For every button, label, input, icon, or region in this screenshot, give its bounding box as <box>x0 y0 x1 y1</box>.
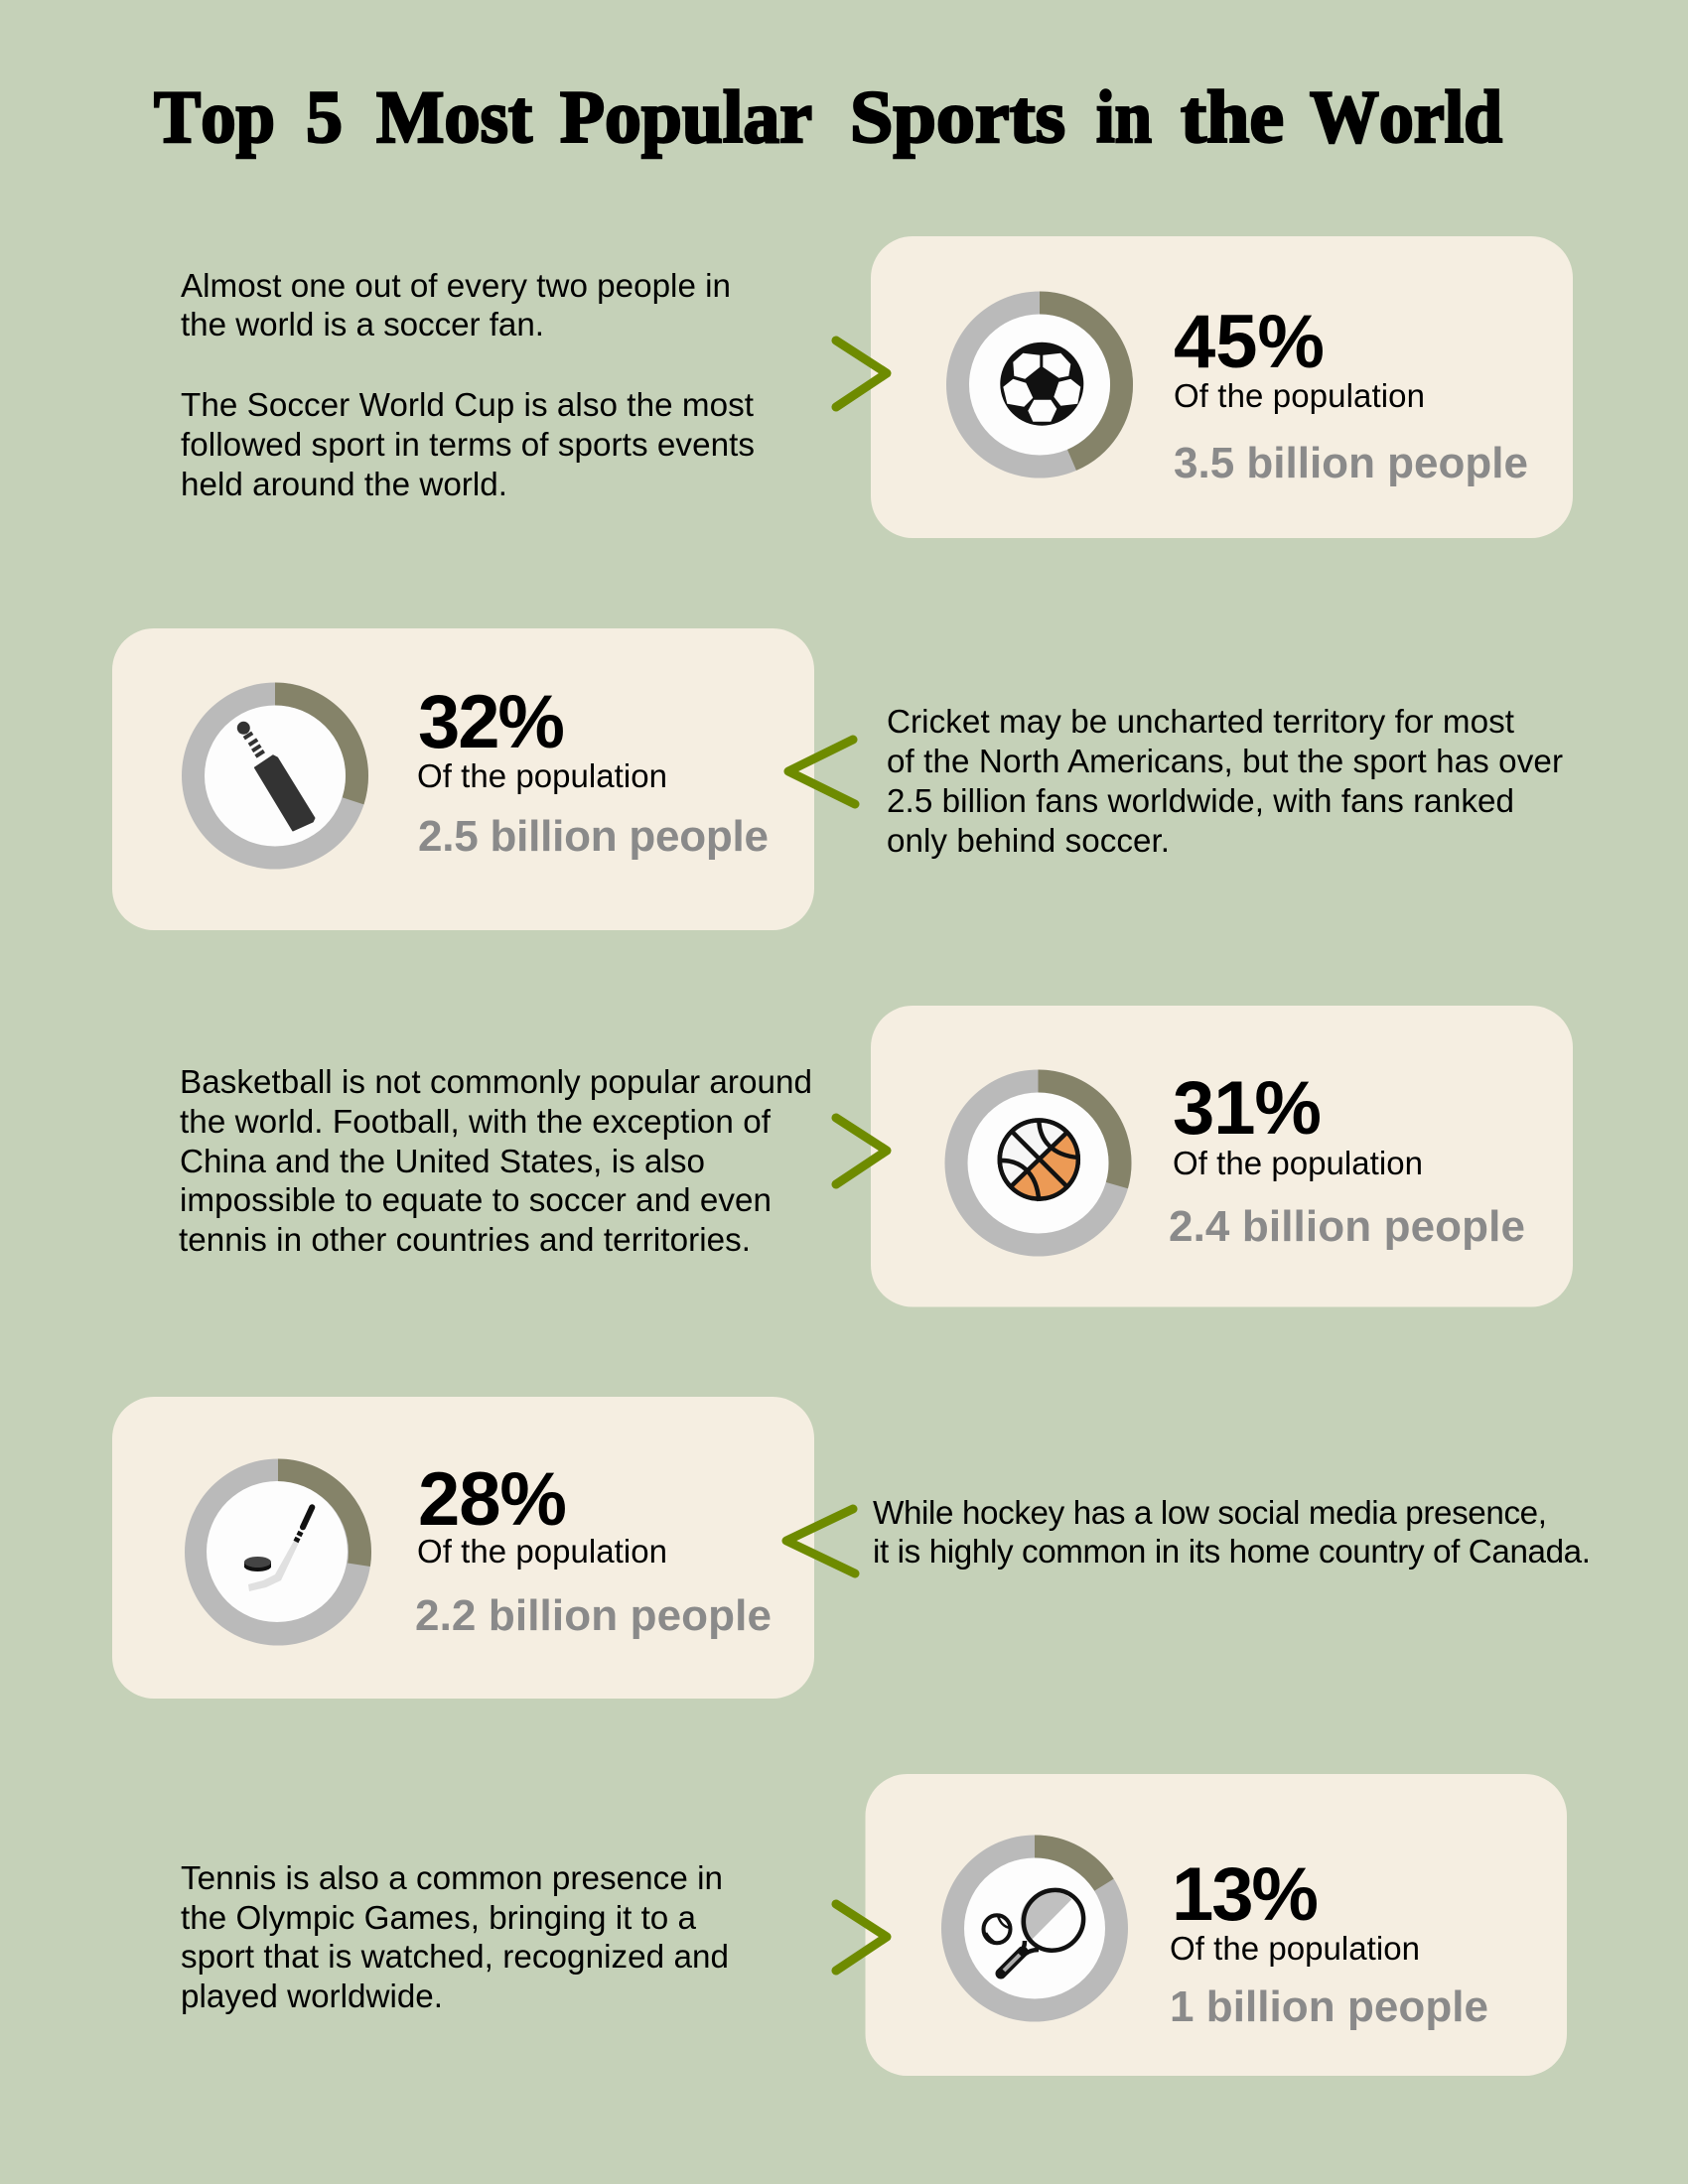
arrow: hockey <box>786 1509 855 1573</box>
title: Top <box>154 76 275 159</box>
text block: soccer: followed sport in terms of sports events <box>181 427 755 464</box>
text block: basketball: Basketball is not commonly popular around <box>180 1064 812 1101</box>
text block: cricket: only behind soccer. <box>887 823 1170 860</box>
stat: 45%: 45% <box>1174 300 1325 384</box>
title: 5 <box>306 76 343 159</box>
title: World <box>1310 76 1502 159</box>
title: Most <box>376 76 532 159</box>
stat: 13%: 13% <box>1172 1852 1319 1937</box>
stat label: Of the population <box>1170 1930 1420 1967</box>
text block: tennis: the Olympic Games, bringing it to a <box>181 1900 697 1937</box>
stat: 31%: 31% <box>1173 1066 1322 1151</box>
text block: basketball: impossible to equate to soccer and even <box>180 1182 772 1219</box>
text block: tennis: played worldwide. <box>181 1979 443 2015</box>
stat: people: 2.5 billion people <box>418 812 769 861</box>
donut chart: 32% <box>182 683 368 870</box>
arrow: tennis <box>836 1904 887 1971</box>
text block: hockey: While hockey has a low social media presence, <box>873 1495 1547 1532</box>
text block: soccer: The Soccer World Cup is also the most <box>181 387 754 424</box>
title: the <box>1181 76 1284 159</box>
stat: 32%: 32% <box>418 680 565 764</box>
text block: cricket: 2.5 billion fans worldwide, with fans ranked <box>887 783 1514 820</box>
icon: cricket bat <box>237 722 315 831</box>
panel: basketball <box>871 1006 1573 1306</box>
text block: basketball: the world. Football, with the exception of <box>180 1104 772 1141</box>
panel: soccer <box>871 236 1573 538</box>
text block: basketball: China and the United States, is also <box>180 1144 705 1180</box>
title: Sports <box>850 76 1065 159</box>
text block: cricket: of the North Americans, but the sport has over <box>887 744 1563 780</box>
stat label: Of the population <box>1173 1145 1423 1181</box>
title <box>154 76 1502 159</box>
donut chart: 13% <box>941 1835 1128 2021</box>
stat label: Of the population <box>417 1533 667 1570</box>
stat: people: 3.5 billion people <box>1174 439 1528 487</box>
text block: cricket: Cricket may be uncharted territory for most <box>887 704 1514 741</box>
stat label: Of the population <box>417 757 667 794</box>
icon: hockey stick and puck <box>244 1507 312 1591</box>
panel: hockey <box>112 1397 814 1699</box>
text block: basketball: tennis in other countries and territories. <box>179 1222 751 1259</box>
arrow: basketball <box>836 1118 887 1184</box>
text block: soccer: Almost one out of every two people in <box>181 268 731 305</box>
title: in <box>1096 76 1152 159</box>
panel: tennis <box>866 1774 1567 2076</box>
text block: basketball <box>179 1064 812 1259</box>
icon: tennis racket and ball <box>983 1878 1096 1974</box>
text block: soccer: held around the world. <box>181 467 507 503</box>
text block: soccer: the world is a soccer fan. <box>181 307 544 343</box>
text block: hockey <box>873 1495 1591 1570</box>
donut chart: 31% <box>945 1070 1132 1257</box>
title: Popular <box>560 76 812 159</box>
text block: hockey: it is highly common in its home country of Canada. <box>873 1534 1591 1570</box>
text block: tennis <box>181 1860 729 2015</box>
stat: 28%: 28% <box>418 1457 567 1542</box>
text block: cricket <box>887 704 1563 860</box>
panel: cricket <box>112 628 814 930</box>
text block: tennis: Tennis is also a common presence in <box>181 1860 723 1897</box>
stat: people: 2.2 billion people <box>415 1591 772 1640</box>
text block: soccer <box>181 268 755 503</box>
donut chart: 45% <box>946 292 1133 478</box>
icon: basketball <box>999 1119 1079 1201</box>
stat: people: 2.4 billion people <box>1169 1202 1525 1251</box>
arrow: cricket <box>788 740 855 804</box>
text block: tennis: sport that is watched, recognized and <box>181 1939 729 1976</box>
arrow: soccer <box>836 341 887 407</box>
donut chart: 28% <box>185 1459 371 1646</box>
stat label: Of the population <box>1174 377 1425 414</box>
stat: people: 1 billion people <box>1170 1982 1488 2031</box>
icon: soccer ball <box>1000 342 1083 426</box>
